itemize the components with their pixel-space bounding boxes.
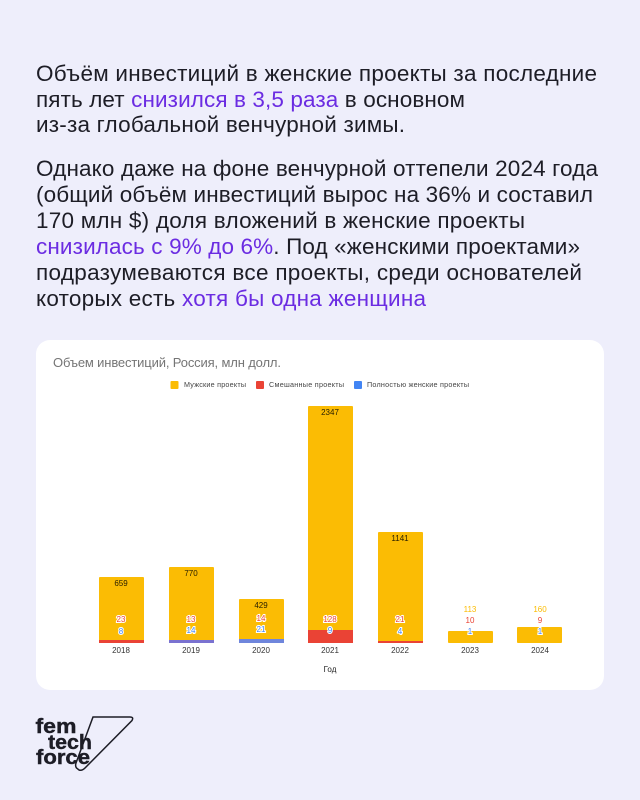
text block: second paragraph: которых есть хотя бы одна женщина [36,286,426,311]
bar 2018: 23 [117,615,126,624]
bar 2022: 2022 [391,646,409,655]
x axis title: Год [324,665,337,674]
text block: second paragraph: 170 млн $) доля вложений в женские проекты [36,208,525,233]
text block: first paragraph: пять лет снизился в 3,5 раза в основном [36,87,465,112]
panel: chart card [36,340,604,690]
bar 2020: 21 [257,625,266,634]
bar 2022: 1141 [391,534,409,543]
logo: femtechforce [36,716,133,770]
bar 2020: 2020 [252,646,270,655]
bar 2023 [448,605,493,655]
text block: first paragraph [36,61,597,137]
bar 2022: 21 [396,615,405,624]
chart legend: Полностью женские проекты [367,380,469,389]
text block: second paragraph: подразумеваются все проекты, среди основателей [36,260,582,285]
bar 2024: 9 [538,616,543,625]
bar 2022 [378,532,423,655]
bar 2021: 9 [328,626,333,635]
text block: first paragraph: из-за глобальной венчурной зимы. [36,112,405,137]
bar 2021: 2347 [321,408,339,417]
bar 2023: 10 [466,616,475,625]
chart title: Объем инвестиций, Россия, млн долл. [53,355,281,370]
bar 2018 [99,577,144,655]
bar 2020 [239,599,284,655]
bar 2021: 128 [323,615,337,624]
bar 2019 [169,567,214,655]
text block: second paragraph: (общий объём инвестиций вырос на 36% и составил [36,182,593,207]
bar 2019: 2019 [182,646,200,655]
logo wordmark: tech [48,732,92,754]
text block: second paragraph [36,156,598,311]
bar 2019: 14 [187,626,196,635]
logo outline [76,717,133,770]
bar 2019: 770 [184,569,198,578]
chart legend: Смешанные проекты [269,380,344,389]
logo wordmark: force [36,747,90,769]
logo wordmark [36,716,92,769]
bar 2024: 160 [533,605,547,614]
bar 2021 [308,406,353,655]
bar 2020: 429 [254,601,268,610]
bar 2024: 1 [538,627,543,636]
bar 2022: 4 [398,627,403,636]
bar 2018: 2018 [112,646,130,655]
bar 2024 [517,605,562,655]
bar 2021: 2021 [321,646,339,655]
bar 2024: 2024 [531,646,549,655]
bar 2019: 13 [187,615,196,624]
chart legend [170,380,469,389]
chart legend: Мужские проекты [184,380,246,389]
bar 2023: 113 [464,605,477,614]
text block: first paragraph: Объём инвестиций в женские проекты за последние [36,61,597,86]
bar 2023: 2023 [461,646,479,655]
bar chart [99,406,562,655]
text block: second paragraph: Однако даже на фоне венчурной оттепели 2024 года [36,156,598,181]
bar 2018: 659 [114,579,128,588]
text block: second paragraph: снизилась с 9% до 6%. Под «женскими проектами» [36,234,580,259]
bar 2023: 1 [468,627,473,636]
logo wordmark: fem [36,716,76,738]
bar 2018: 8 [119,627,124,636]
bar 2020: 14 [257,614,266,623]
